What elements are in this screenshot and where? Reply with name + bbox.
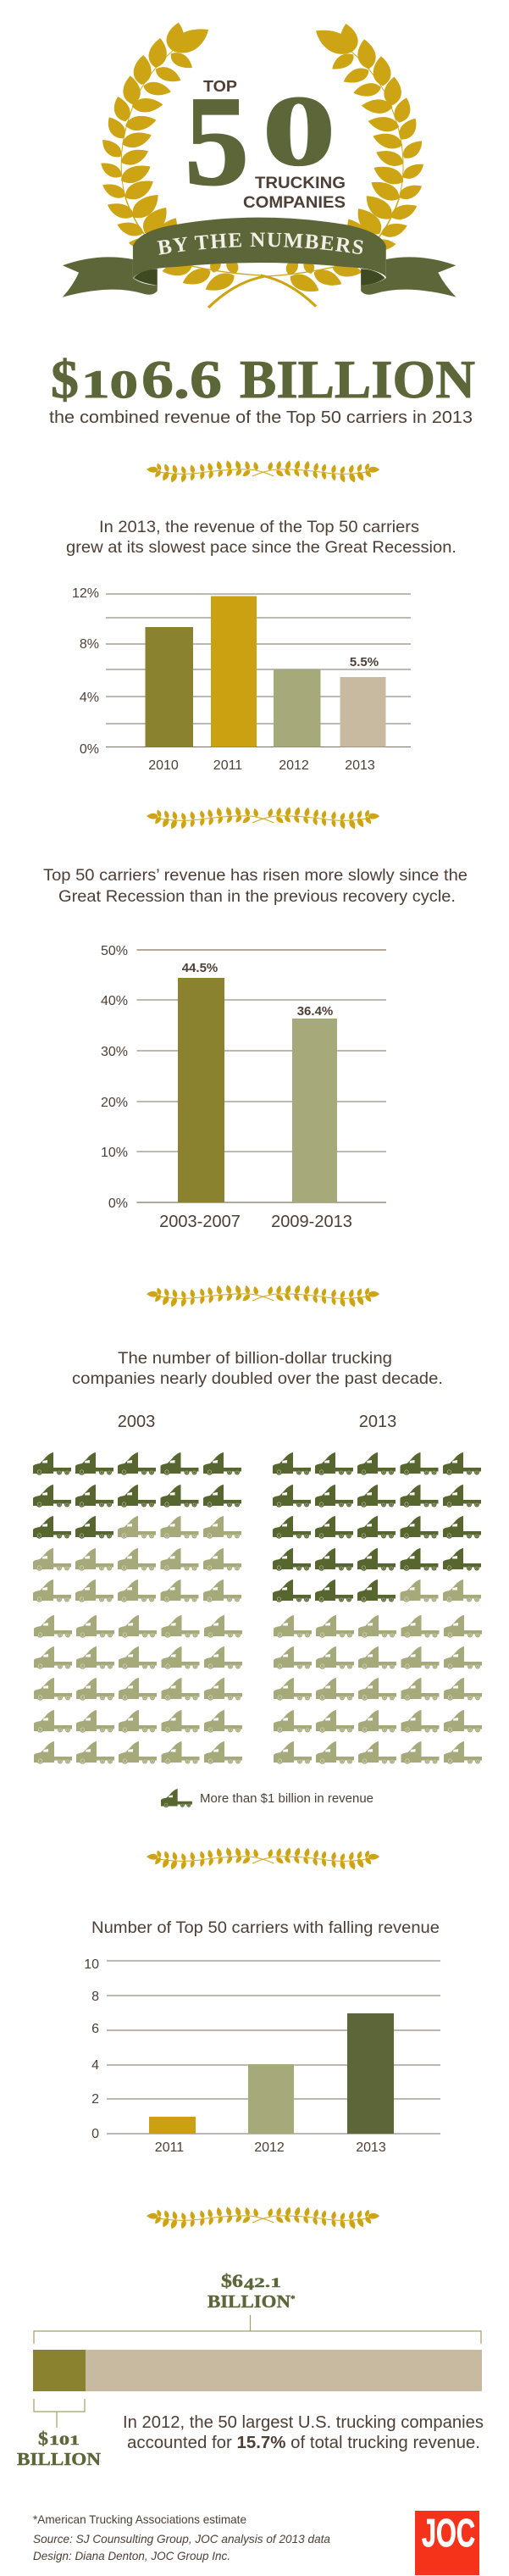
laurel wreath — [97, 21, 428, 308]
panel: billion-dollar companies — [33, 1350, 482, 1807]
pictogram: trucks 2013 — [273, 1452, 482, 1764]
headline figure: 10 — [81, 363, 138, 407]
divider: wheat 1 — [147, 459, 379, 484]
pictogram: trucks 2003 — [33, 1452, 242, 1764]
bar chart: recovery cycles: 2009-2013 — [271, 1213, 352, 1231]
bar chart: recovery cycles: 50% — [101, 944, 128, 958]
bar chart: revenue growth by year: 8% — [80, 637, 99, 652]
divider: wheat 5 — [147, 2206, 379, 2230]
bar chart: revenue growth by year: 5.5% — [350, 655, 379, 669]
footer notes: Source: SJ Counsulting Group, JOC analysis of 2013 data — [33, 2532, 330, 2545]
big number 50 — [185, 69, 335, 212]
headline subtitle: the combined revenue of the Top 50 carriers in 2013 — [49, 408, 473, 427]
bar chart: recovery cycles: 44.5% — [182, 961, 218, 975]
heading: companies nearly doubled over the past decade. — [72, 1370, 443, 1388]
bar chart: recovery cycles: 0% — [108, 1196, 128, 1211]
bar chart: revenue growth by year — [72, 586, 411, 773]
big number 50: 0 — [263, 75, 335, 186]
bar chart: revenue growth by year: 4% — [80, 691, 99, 705]
heading — [66, 519, 456, 557]
panel: falling revenue — [84, 1919, 440, 2155]
bar chart: carriers with falling revenue: 10 — [84, 1957, 99, 1972]
total label: BILLION — [207, 2291, 290, 2312]
big number 50: 5 — [185, 69, 249, 212]
heading: The number of billion-dollar trucking — [118, 1350, 392, 1368]
bar chart: revenue growth by year: 2013 — [345, 758, 375, 773]
bar chart: carriers with falling revenue: 4 — [91, 2058, 99, 2073]
bar chart: revenue growth by year: 2010 — [148, 758, 179, 773]
bar chart: recovery cycles: 20% — [101, 1096, 128, 1110]
ribbon text: BY THE NUMBERS — [157, 232, 362, 255]
total label: 2.1 — [254, 2276, 281, 2290]
bar chart: recovery cycles: 40% — [101, 994, 128, 1008]
bar chart: carriers with falling revenue: 2011 — [155, 2140, 184, 2155]
bar chart: carriers with falling revenue: 2 — [91, 2092, 99, 2107]
logo: JOC — [415, 2511, 479, 2575]
divider: wheat 4 — [147, 1846, 379, 1871]
bar chart: carriers with falling revenue — [84, 1957, 440, 2155]
bar chart: revenue growth by year: 0% — [80, 742, 99, 757]
header emblem — [63, 22, 456, 308]
share description: In 2012, the 50 largest U.S. trucking companies — [123, 2413, 484, 2432]
share label: $ — [38, 2428, 48, 2449]
lower bracket — [34, 2399, 85, 2428]
share label: 101 — [49, 2434, 80, 2448]
total label: $6 — [221, 2270, 243, 2291]
bar chart: recovery cycles: 10% — [101, 1146, 128, 1160]
bar chart: carriers with falling revenue: 8 — [91, 1990, 99, 2004]
year label 2013: 2013 — [359, 1413, 396, 1431]
panel: share of trucking revenue — [17, 2270, 484, 2469]
total label — [207, 2270, 296, 2312]
panel: revenue growth — [66, 519, 456, 773]
legend: More than $1 billion in revenue — [200, 1792, 373, 1806]
bar chart: revenue growth by year: 12% — [72, 586, 99, 601]
divider: wheat 3 — [147, 1284, 379, 1308]
logo: JOC: JOC — [422, 2511, 475, 2555]
bar chart: carriers with falling revenue: 6 — [91, 2022, 99, 2036]
headline figure — [51, 350, 475, 409]
bar chart: carriers with falling revenue: 0 — [91, 2127, 99, 2141]
footer notes — [33, 2512, 330, 2562]
heading: In 2013, the revenue of the Top 50 carriers — [99, 519, 419, 536]
year label 2003: 2003 — [118, 1413, 155, 1431]
ribbon banner — [63, 218, 456, 297]
share label — [17, 2428, 101, 2469]
share description: accounted for 15.7% of total trucking revenue. — [127, 2434, 480, 2452]
heading — [72, 1350, 443, 1388]
bar chart: revenue growth by year: 2011 — [213, 758, 242, 773]
bar chart: recovery cycles: 30% — [101, 1045, 128, 1059]
total label: 4 — [244, 2275, 254, 2294]
bar chart: carriers with falling revenue: 2012 — [254, 2140, 285, 2155]
headline figure: BILLION — [240, 350, 475, 409]
share description — [123, 2413, 484, 2452]
share label: BILLION — [17, 2449, 101, 2469]
panel: recovery cycle comparison — [43, 867, 468, 1231]
footer notes: Design: Diana Denton, JOC Group Inc. — [33, 2549, 230, 2562]
footer notes: *American Trucking Associations estimate — [33, 2512, 246, 2526]
heading: grew at its slowest pace since the Great Recession. — [66, 539, 456, 557]
heading: Great Recession than in the previous recovery cycle. — [58, 888, 456, 906]
label: companies: COMPANIES — [243, 194, 346, 212]
label: top: TOP — [203, 78, 237, 95]
headline figure: $ — [51, 350, 79, 409]
total label: * — [290, 2294, 296, 2304]
bar chart: recovery cycles — [101, 944, 386, 1231]
divider: wheat 2 — [147, 806, 379, 830]
heading — [43, 867, 468, 906]
bar chart: revenue growth by year: 2012 — [279, 758, 309, 773]
bar chart: recovery cycles: 36.4% — [297, 1004, 333, 1019]
headline figure: 6.6 — [141, 350, 222, 409]
upper bracket — [34, 2315, 481, 2344]
label: trucking: TRUCKING — [255, 175, 346, 192]
stacked proportion bar — [33, 2350, 482, 2391]
bar chart: carriers with falling revenue: 2013 — [356, 2140, 386, 2155]
heading: Top 50 carriers’ revenue has risen more slowly since the — [43, 867, 468, 885]
legend — [161, 1789, 373, 1807]
bar chart: recovery cycles: 2003-2007 — [159, 1213, 241, 1231]
heading: Number of Top 50 carriers with falling revenue — [91, 1919, 440, 1937]
